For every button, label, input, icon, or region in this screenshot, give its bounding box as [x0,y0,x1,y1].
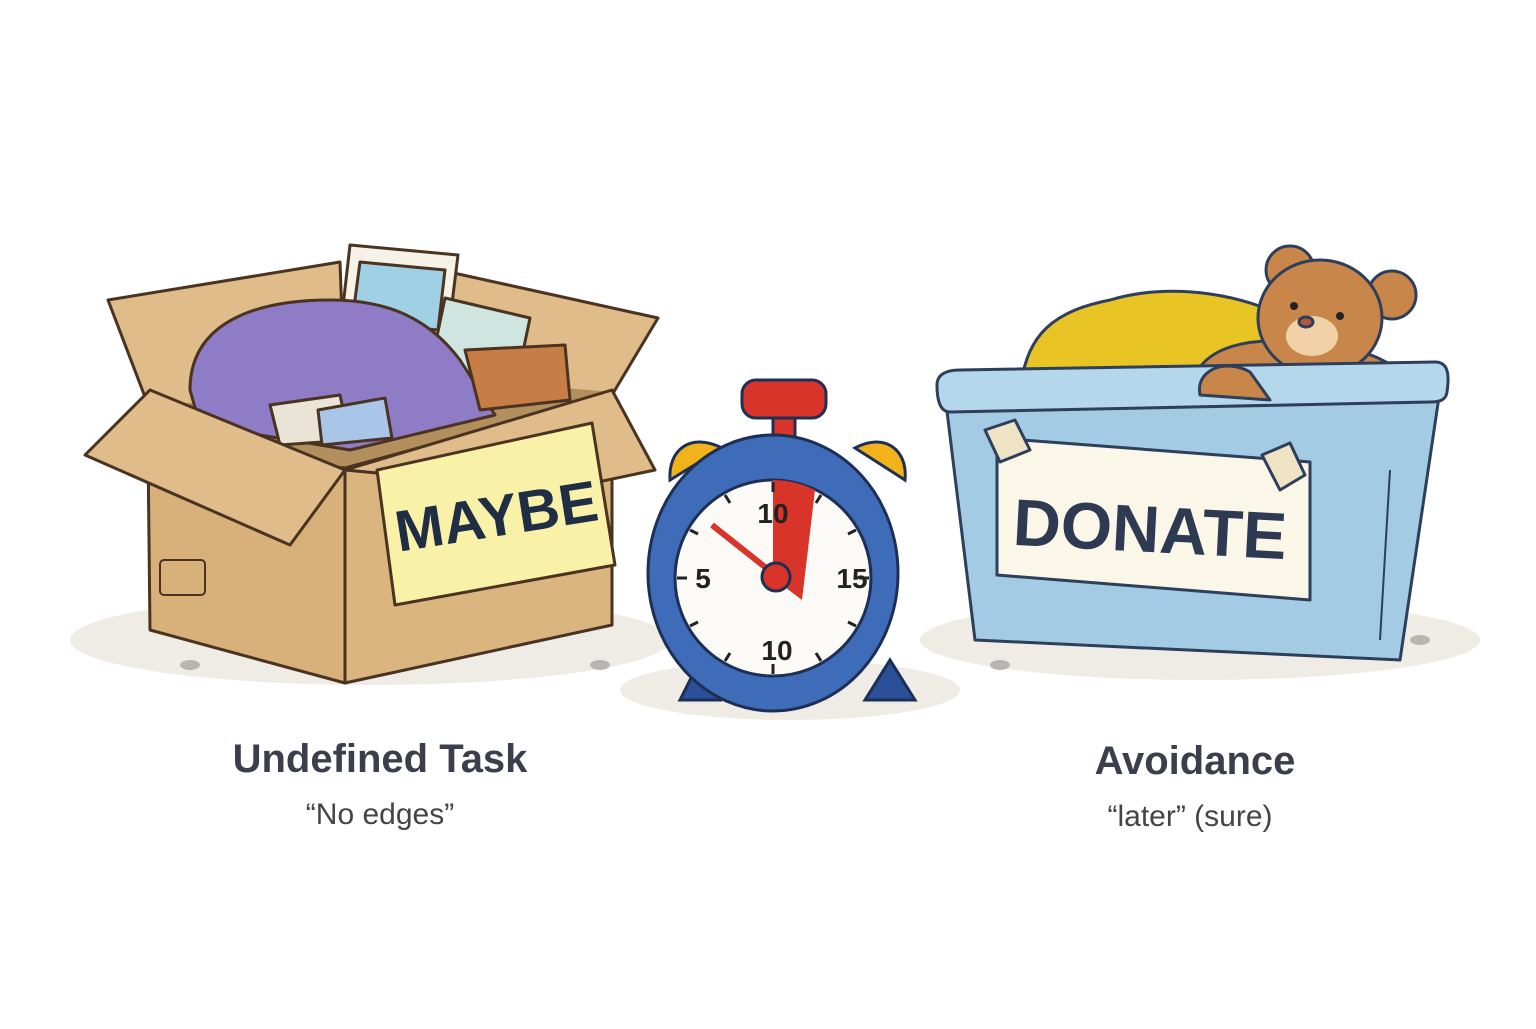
icon: bear arm [1199,366,1270,400]
label: DONATE: DONATE [1011,485,1289,573]
icon: teddy bear [1190,246,1416,400]
label: DONATE [985,420,1310,600]
icon: alarm clock: 10 [761,635,793,666]
icon: alarm clock: 5 [695,563,711,594]
caption: avoidance: Avoidance [1095,739,1295,783]
ground shadows [70,595,1480,720]
icon: photo [338,245,458,360]
icon: alarm clock: 10 [757,498,789,529]
label: MAYBE: MAYBE [391,468,602,565]
caption: avoidance: “later” (sure) [1107,800,1273,833]
icon: alarm clock: 15 [836,563,868,594]
caption: undefined task [233,737,528,831]
caption: undefined task: Undefined Task [233,737,528,781]
label: MAYBE [377,423,615,605]
caption: avoidance [1095,739,1295,833]
panel: maybe box [85,245,658,683]
panel: donate bin [937,246,1448,660]
icon: purple cloth [190,300,495,450]
caption: undefined task: “No edges” [306,798,454,831]
icon: yellow cloth [1020,291,1300,405]
icon: alarm clock [648,380,915,711]
